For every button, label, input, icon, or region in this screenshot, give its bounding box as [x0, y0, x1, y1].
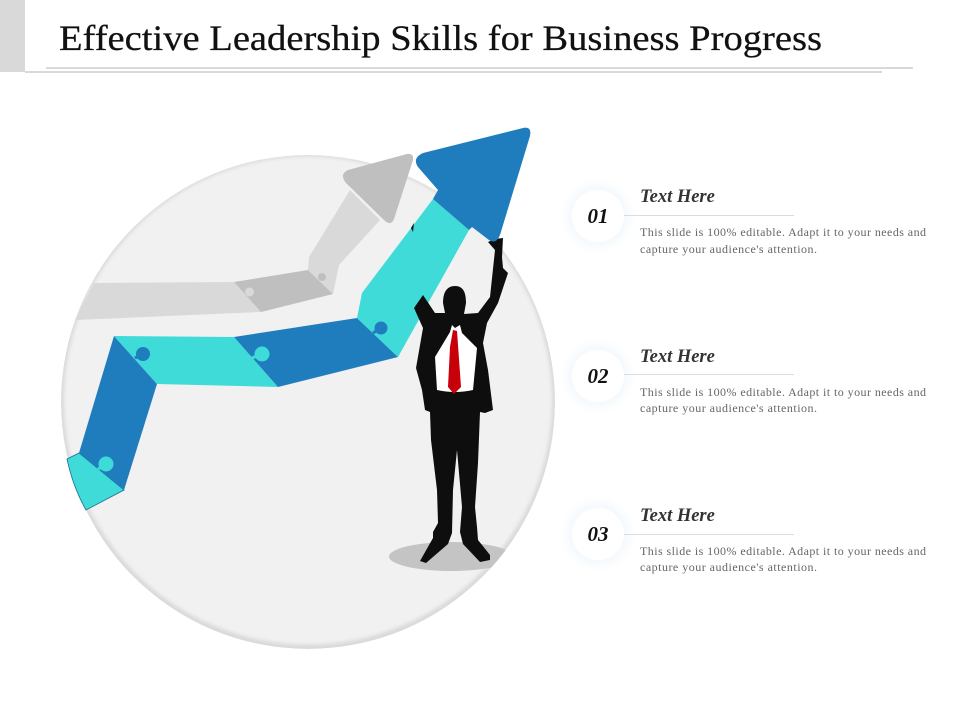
teal tail segment	[67, 453, 124, 510]
number badge 02: 02	[588, 364, 609, 388]
body text 02: capture your audience's attention.	[640, 401, 817, 415]
number badge 03: 03	[588, 522, 608, 546]
blue arrow head	[416, 128, 530, 242]
body text 03: capture your audience's attention.	[640, 560, 817, 574]
item 01	[560, 178, 926, 256]
body text 01: This slide is 100% editable. Adapt it to your needs and	[640, 225, 926, 239]
body text 02	[640, 385, 926, 415]
body text 02: This slide is 100% editable. Adapt it to your needs and	[640, 385, 926, 399]
white shirt	[435, 325, 477, 392]
number badge 03	[560, 496, 636, 572]
number badge 01	[560, 178, 636, 254]
connector knobs	[98, 322, 388, 472]
title: Effective Leadership Skills for Business Progress	[59, 18, 822, 58]
teal middle segment	[114, 336, 278, 387]
item 03	[560, 496, 926, 574]
heading 02: Text Here	[640, 347, 715, 367]
header accent block	[0, 0, 25, 72]
background circle	[61, 155, 555, 649]
body text 01	[640, 225, 926, 256]
ground shadow	[389, 542, 513, 571]
teal upper segment	[357, 199, 469, 357]
colored puzzle arrow	[67, 199, 469, 510]
item 02	[560, 338, 926, 415]
businessman silhouette	[411, 223, 508, 563]
grey band middle segment	[234, 270, 333, 312]
blue middle segment	[234, 318, 398, 387]
grey band left segment	[75, 282, 261, 320]
heading 03: Text Here	[640, 506, 715, 526]
body text 03: This slide is 100% editable. Adapt it to your needs and	[640, 544, 926, 558]
heading 01: Text Here	[640, 187, 715, 207]
body text 01: capture your audience's attention.	[640, 242, 817, 256]
grey puzzle arrow	[75, 154, 413, 320]
grey connector knobs	[245, 273, 326, 296]
number badge 02	[560, 338, 636, 414]
body text 03	[640, 544, 926, 574]
body silhouette	[414, 238, 508, 563]
raised hand fragment	[411, 223, 414, 232]
grey band upper segment	[308, 190, 380, 294]
blue lower segment	[79, 336, 157, 490]
red tie	[448, 330, 461, 394]
grey arrow head	[343, 154, 413, 223]
number badge 01: 01	[588, 204, 608, 228]
